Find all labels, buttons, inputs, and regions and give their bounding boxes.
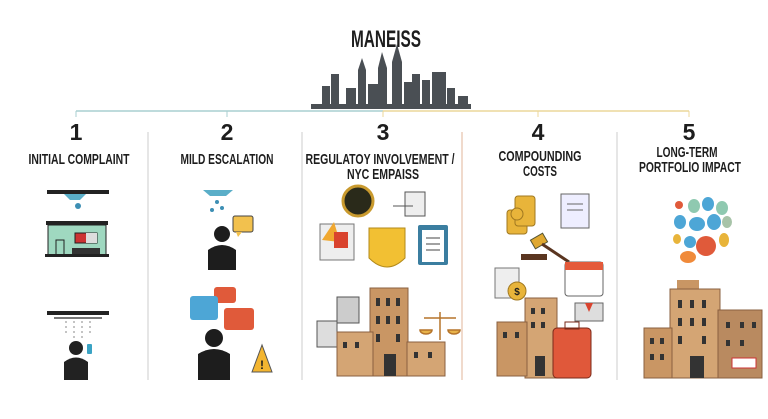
dividers <box>148 132 617 380</box>
step 1 heading: 1 <box>70 119 83 145</box>
step 3 heading <box>306 119 455 183</box>
icon: city buildings with scales <box>317 288 460 376</box>
timeline <box>76 111 689 117</box>
step 3 heading: REGULATOY INVOLVEMENT / <box>306 151 455 168</box>
step 2 heading: 2 <box>221 119 233 145</box>
step 1 heading: INITIAL COMPLAINT <box>28 151 130 168</box>
icon: person with chat bubbles and warning sign <box>190 287 272 380</box>
step 1 heading <box>28 119 130 168</box>
step 4 heading <box>498 119 582 180</box>
icon: leaking room <box>45 190 109 257</box>
title: MANEISS <box>351 26 421 53</box>
step 4 heading: COSTS <box>523 163 557 180</box>
step 2 heading: MILD ESCALATION <box>180 151 274 168</box>
icon group: coins, contract, gavel <box>507 194 589 262</box>
step 4 heading: COMPOUNDING <box>498 148 582 165</box>
icon: person with speech bubble <box>203 190 253 270</box>
icon group: bill, calendar, buildings, suitcase: $ <box>514 287 520 298</box>
skyline <box>311 44 471 109</box>
step 4 heading: 4 <box>532 119 545 145</box>
step 3 heading: 3 <box>377 119 389 145</box>
icon: large apartment building <box>644 280 762 378</box>
step 5 heading: LONG-TERM <box>656 144 718 161</box>
step 5 heading: 5 <box>683 119 696 145</box>
step 5 heading <box>639 119 741 176</box>
icon group: regulatory documents and badge <box>320 186 448 267</box>
step 3 heading: NYC EMPAISS <box>347 166 419 183</box>
icon group: bill, calendar, buildings, suitcase <box>495 262 603 378</box>
icon: colored stones cluster <box>673 197 732 263</box>
icon: person with phone under leak <box>47 311 109 380</box>
step 2 heading <box>180 119 274 168</box>
icon: person with chat bubbles and warning sign: ! <box>260 358 264 372</box>
